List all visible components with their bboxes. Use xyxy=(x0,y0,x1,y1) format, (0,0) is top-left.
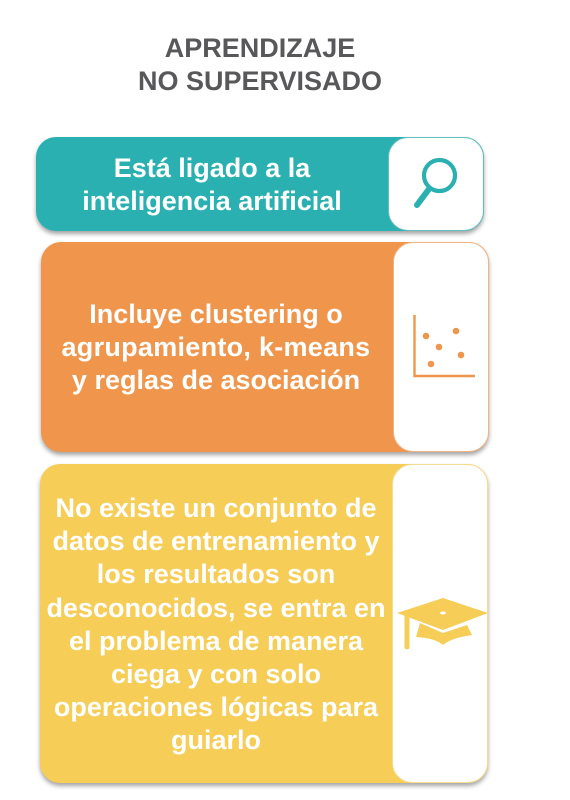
icon panel: magnifier xyxy=(388,137,484,231)
text: clustering xyxy=(62,299,370,395)
icon panel: scatter xyxy=(393,242,489,452)
icon panel: graduation cap xyxy=(392,464,488,783)
panel: artificial intelligence xyxy=(36,137,484,231)
text: no training data: No existe un conjunto de xyxy=(55,493,377,523)
icon: graduation cap xyxy=(397,598,488,650)
text: clustering: Incluye clustering o xyxy=(89,299,343,329)
text: no training data: los resultados son xyxy=(97,559,335,589)
text: no training data: el problema de manera xyxy=(69,626,363,656)
text: no training data: ciega y con solo xyxy=(111,659,321,689)
text: no training data: guiarlo xyxy=(171,725,261,755)
title xyxy=(138,32,382,96)
text: artificial intelligence: inteligencia artificial xyxy=(82,186,342,216)
text: artificial intelligence: Está ligado a la xyxy=(114,153,310,183)
panel: clustering xyxy=(41,242,489,452)
text: no training data: desconocidos, se entra en xyxy=(46,593,386,623)
text: no training data: datos de entrenamiento y xyxy=(52,526,380,556)
title: NO SUPERVISADO xyxy=(138,66,382,96)
text: artificial intelligence xyxy=(82,153,342,216)
panel: no training data xyxy=(40,464,488,783)
text: no training data xyxy=(46,493,386,755)
text: clustering: y reglas de asociación xyxy=(72,365,360,395)
icon: scatter plot xyxy=(413,315,475,378)
icon: magnifying glass xyxy=(414,158,458,208)
title: APRENDIZAJE xyxy=(165,32,355,62)
text: clustering: agrupamiento, k-means xyxy=(62,332,370,362)
text: no training data: operaciones lógicas para xyxy=(54,692,378,722)
